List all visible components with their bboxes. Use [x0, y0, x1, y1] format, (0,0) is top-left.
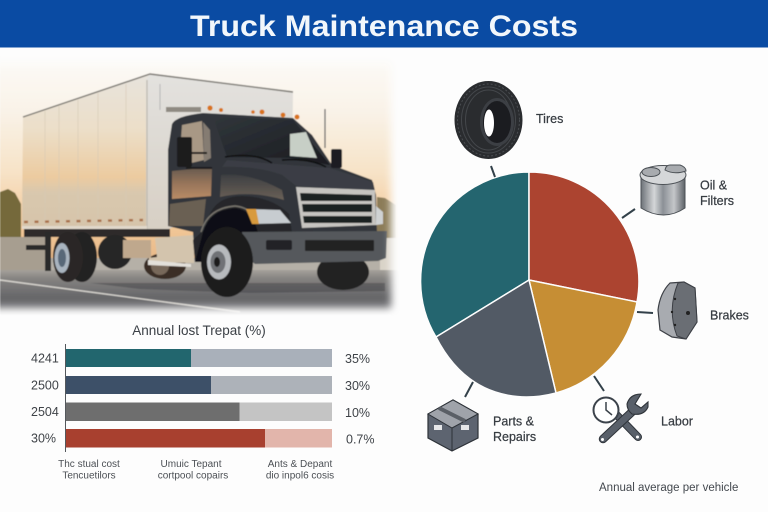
bar row 1: 4241	[31, 352, 59, 366]
chart axis	[64, 344, 66, 452]
sunset sky	[0, 69, 396, 259]
road	[0, 270, 400, 315]
panel: bar chart	[31, 323, 374, 482]
icon: tire	[454, 81, 522, 159]
icon: brake pad	[658, 282, 697, 339]
caption: Annual average per vehicle	[599, 482, 738, 494]
connector: parts	[465, 382, 473, 397]
footnote column 2: Umuic Tepant	[161, 459, 222, 470]
pie slice: tires	[421, 172, 529, 337]
pie slice: parts and repairs	[436, 280, 556, 397]
connector: brakes	[637, 312, 653, 313]
connector: tires	[491, 166, 495, 177]
panel: truck photo	[0, 50, 400, 315]
bar row 4: 0.7%	[346, 432, 374, 446]
pie slice: brakes	[529, 280, 637, 393]
bar row 1: 35%	[345, 352, 370, 366]
connector: oil	[622, 209, 635, 218]
label: parts and repairs: Repairs	[493, 430, 536, 444]
bar row 2	[31, 376, 370, 394]
label: oil and filters: Filters	[700, 194, 734, 208]
front bumper	[242, 231, 387, 264]
connector: labor	[594, 376, 604, 391]
bar row 3: 2504	[31, 405, 59, 419]
truck grille	[296, 187, 383, 228]
marker lights	[207, 105, 300, 120]
truck cab	[168, 105, 377, 262]
bar row 3: 10%	[345, 406, 370, 420]
footnote column 2: cortpool copairs	[158, 470, 228, 482]
pie slice: oil and filters	[529, 172, 639, 302]
header banner	[0, 0, 768, 48]
label: tires: Tires	[536, 112, 563, 126]
label: brakes: Brakes	[710, 308, 749, 322]
bar row 2: 2500	[31, 378, 59, 392]
concrete wall	[0, 237, 400, 271]
bar row 2: 30%	[345, 379, 370, 393]
panel: pie chart	[421, 172, 639, 397]
chassis and under-body	[24, 229, 194, 279]
rear wheels	[53, 232, 369, 290]
icon: oil can	[640, 165, 686, 215]
label: labor: Labor	[661, 414, 693, 428]
icon: clock and wrench	[594, 394, 648, 441]
bar row 4	[31, 429, 374, 448]
bar row 1	[31, 349, 370, 367]
footnote column 3: dio inpol6 cosis	[266, 470, 334, 482]
label: parts and repairs: Parts &	[493, 414, 535, 428]
title: Truck Maintenance Costs	[190, 10, 578, 43]
headlight	[246, 209, 291, 224]
front wheel	[201, 227, 253, 297]
icon: parts box	[428, 400, 478, 451]
bar row 4: 30%	[31, 432, 56, 446]
footnote column 1: Thc stual cost	[58, 459, 120, 470]
bar row 3	[31, 402, 370, 421]
background trees	[0, 189, 396, 238]
footnote column 3: Ants & Depant	[268, 459, 332, 470]
chart title: Annual lost Trepat (%)	[132, 323, 266, 338]
truck cargo box	[22, 74, 293, 230]
label: oil and filters: Oil &	[700, 178, 728, 192]
footnote column 1: Tencuetilors	[62, 470, 116, 482]
